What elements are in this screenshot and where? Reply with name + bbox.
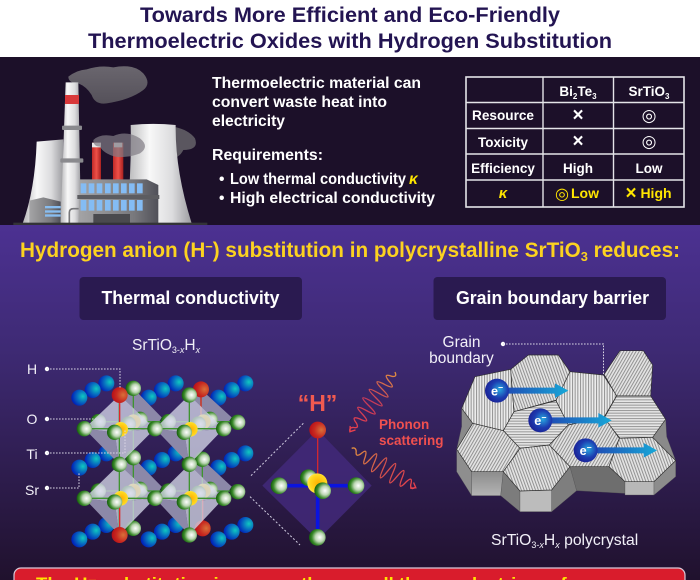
electron arrow 1: − [498, 383, 503, 393]
comparison table: ◎ [555, 186, 569, 203]
comparison table: 2 [573, 92, 578, 101]
text block: intro and requirements: electricity [212, 113, 285, 130]
section heading: 3 [581, 249, 588, 264]
element labels with leader lines: Ti [26, 446, 38, 462]
comparison table: SrTiO [629, 84, 665, 99]
text block: intro and requirements: κ [409, 171, 419, 188]
electron arrow 2: e [534, 414, 541, 428]
panel heading: grain boundary barrier [434, 277, 666, 320]
electron arrow 2 [528, 408, 612, 432]
caption: polycrystal: H [544, 532, 555, 549]
element labels with leader lines: H [27, 361, 37, 377]
text block: intro and requirements: High electrical conductivity [230, 190, 435, 207]
comparison table: ◎ [642, 132, 656, 151]
label: phonon scattering: Phonon [379, 417, 429, 432]
comparison table: κ [499, 185, 509, 202]
comparison table: High [563, 161, 593, 176]
comparison table [466, 77, 684, 207]
wave: scattered phonon, upper [342, 366, 403, 438]
electron arrow 3: e [580, 444, 587, 458]
label: grain boundary: Grain [443, 334, 480, 351]
text block: intro and requirements: • [219, 171, 224, 188]
crystal lattice [71, 375, 253, 547]
section heading: ) substitution in polycrystalline SrTiO [213, 239, 581, 262]
title: Towards More Efficient and Eco-Friendly [140, 3, 560, 27]
comparison table: × [572, 131, 584, 152]
comparison table: Low [636, 161, 663, 176]
caption: polycrystal: 3-x [531, 540, 544, 550]
label: phonon scattering [379, 417, 444, 448]
label: "H": “H” [298, 390, 337, 416]
label: phonon scattering: scattering [379, 433, 444, 448]
illustration: power plant [13, 66, 207, 225]
comparison table: 3 [665, 92, 670, 101]
title: Thermoelectric Oxides with Hydrogen Substitution [88, 29, 612, 53]
comparison table: Te [577, 84, 593, 99]
element labels with leader lines: O [27, 411, 38, 427]
electron arrow 3 [574, 438, 657, 462]
section heading: reduces: [588, 239, 680, 262]
label: grain boundary: boundary [429, 350, 494, 367]
comparison table: Efficiency [471, 161, 535, 176]
electron arrow 3: − [587, 442, 592, 452]
electron arrow 1 [485, 379, 568, 403]
comparison table: Resource [472, 108, 534, 123]
formula label: SrTiO3-xHx: H [184, 337, 196, 354]
caption: polycrystal: x [554, 540, 560, 550]
polycrystal diagram [457, 351, 676, 512]
comparison table: Toxicity [478, 135, 528, 150]
panel heading: thermal conductivity [80, 277, 302, 320]
section heading: − [205, 239, 213, 254]
text block: intro and requirements: convert waste heat into [212, 94, 387, 111]
element labels with leader lines: Sr [25, 482, 39, 498]
electron arrow 2: − [541, 412, 546, 422]
text block: intro and requirements: Low thermal conductivity [230, 171, 406, 188]
comparison table: Bi [559, 84, 573, 99]
comparison table: × [625, 183, 637, 204]
formula label: SrTiO3-xHx: x [195, 345, 201, 355]
formula label: SrTiO3-xHx: SrTiO [132, 337, 172, 354]
wave: scattered phonon, lower [346, 440, 421, 496]
text block: intro and requirements: Requirements: [212, 147, 323, 164]
text block: intro and requirements: Thermoelectric material can [212, 75, 421, 92]
formula label: SrTiO3-xHx: 3-x [172, 345, 184, 355]
text block: intro and requirements: • [219, 190, 224, 207]
title [88, 3, 612, 53]
panel heading: grain boundary barrier: Grain boundary barrier [456, 288, 649, 308]
panel heading: thermal conductivity: Thermal conductivity [102, 288, 280, 308]
comparison table: ◎ [642, 106, 656, 125]
comparison table: High [640, 185, 672, 201]
electron arrow 1: e [491, 384, 498, 398]
caption: polycrystal: SrTiO [491, 532, 531, 549]
comparison table: 3 [592, 92, 597, 101]
comparison table: × [572, 105, 584, 126]
comparison table: Low [571, 185, 599, 201]
element labels with leader lines [25, 361, 125, 498]
label: grain boundary [429, 334, 604, 374]
section heading: Hydrogen anion (H [20, 239, 208, 262]
text block: intro and requirements [212, 75, 435, 207]
conclusion banner [14, 568, 685, 580]
caption: polycrystal: polycrystal [560, 532, 638, 549]
detail: H-substituted octahedron [250, 422, 372, 546]
